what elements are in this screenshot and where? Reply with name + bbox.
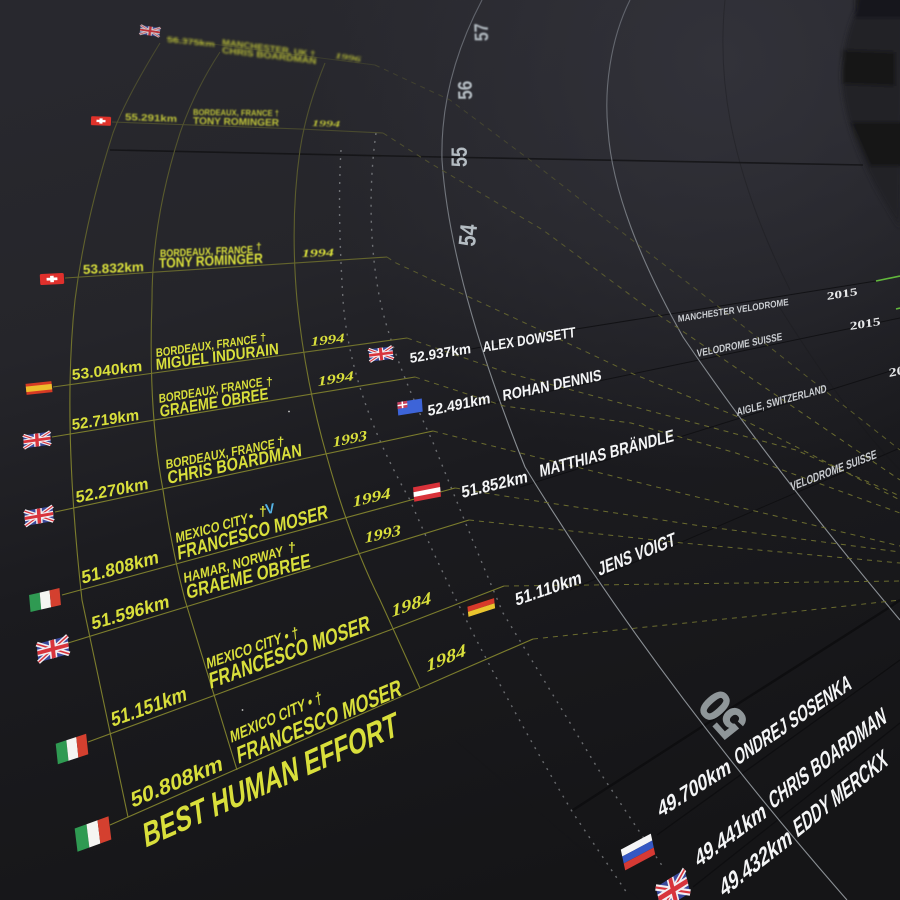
record row 56.375km: 56.375km	[167, 35, 215, 49]
record row 50.808km: 1984	[425, 640, 467, 676]
record row 55.291km: TONY ROMINGER	[193, 116, 280, 129]
row: rohan dennis	[427, 316, 881, 420]
row: eddy merckx	[717, 744, 890, 900]
faint outer rings	[455, 0, 900, 900]
row: ondrej sosenka: 49.700km	[656, 752, 733, 823]
flag: great britain, top	[139, 25, 161, 37]
flag: great britain, hamar	[37, 636, 69, 662]
record row 53.832km: BORDEAUX, FRANCE	[160, 244, 253, 260]
record row 56.375km: 1996	[335, 51, 363, 64]
flag: russia, sosenka	[621, 834, 655, 870]
record row 51.808km	[81, 485, 392, 588]
flag: great britain, boardman 49km	[656, 869, 690, 900]
record row 52.270km: 1993	[332, 428, 368, 451]
dotted grey arcs	[340, 133, 663, 893]
row: jens voigt: JENS VOIGT	[597, 528, 677, 580]
record row 51.596km: †	[288, 539, 296, 555]
row: alex dowsett	[409, 286, 858, 366]
row: alex dowsett: 2015	[826, 286, 858, 303]
record row 52.719km: GRAEME OBREE	[159, 384, 269, 421]
scale label 55: 55	[447, 147, 472, 167]
dark hour creases behind rows	[110, 150, 900, 887]
flag: italy, moser 1994	[29, 588, 61, 612]
record row 53.040km: 53.040km	[71, 358, 143, 384]
record row 51.151km: MEXICO CITY • †	[206, 624, 299, 673]
record row 52.719km: 52.719km	[71, 407, 139, 434]
flag: spain	[25, 381, 53, 395]
record row 51.808km: †	[259, 503, 267, 519]
heading: best human effort: BEST HUMAN EFFORT	[141, 704, 400, 856]
row: rohan dennis: 2015	[849, 316, 881, 333]
record row 53.040km: MIGUEL INDURAIN	[155, 340, 279, 374]
row: alex dowsett: 52.937km	[409, 340, 471, 366]
record row 53.832km: 1994	[302, 247, 335, 260]
flag: switzerland, row 55km	[91, 116, 111, 126]
record row 51.596km	[91, 522, 402, 634]
record row 53.832km: 53.832km	[83, 259, 144, 277]
record row 51.808km: V	[264, 500, 276, 517]
record row 53.832km	[83, 242, 335, 277]
record row 52.270km: †	[277, 434, 284, 449]
dark central disc, top right	[842, 0, 900, 228]
record row 50.808km: 50.808km	[130, 751, 224, 813]
record row 51.596km: 1993	[364, 522, 402, 547]
flag: germany, voigt	[467, 593, 495, 617]
paper specks	[242, 411, 290, 711]
row: alex dowsett: MANCHESTER VELODROME	[678, 297, 789, 325]
record row 52.719km: BORDEAUX, FRANCE	[159, 375, 263, 406]
speed scale labels	[447, 23, 757, 747]
record row 53.040km: 1994	[310, 330, 346, 349]
flag: italy, moser 51.151	[56, 734, 88, 764]
row: matthias brandle	[461, 359, 900, 502]
grey speed scale arcs	[442, 0, 900, 900]
flag: australia, dennis	[397, 398, 423, 416]
row: rohan dennis: VELODROME SUISSE	[696, 331, 782, 360]
record row 51.596km: GRAEME OBREE	[186, 550, 311, 604]
record row 56.375km	[167, 35, 363, 66]
row: matthias brandle: MATTHIAS BRÄNDLE	[539, 425, 675, 481]
record row 51.151km: 1984	[391, 588, 432, 621]
record row 52.270km: 52.270km	[75, 474, 149, 507]
row: jens voigt	[514, 447, 877, 610]
row: ondrej sosenka: ONDREJ SOSENKA	[732, 668, 854, 771]
record row 51.808km: MEXICO CITY	[175, 510, 249, 546]
record row 50.808km: MEXICO CITY • †	[229, 688, 323, 747]
record row 51.596km: HAMAR, NORWAY	[183, 543, 284, 586]
record row 55.291km: 55.291km	[125, 112, 177, 125]
record row 53.040km: †	[260, 332, 266, 344]
record row 52.719km: 1994	[317, 368, 355, 389]
record row 53.832km: TONY ROMINGER	[159, 250, 263, 271]
flag: great britain, dowsett	[368, 346, 394, 362]
row: chris boardman: 49.441km	[693, 796, 768, 873]
record row 53.832km: †	[256, 242, 262, 253]
record row 52.719km	[71, 368, 355, 434]
scale label 56: 56	[455, 80, 477, 100]
row: matthias brandle: AIGLE, SWITZERLAND	[736, 383, 827, 419]
record row 56.375km: CHRIS BOARDMAN	[222, 45, 317, 66]
record row 50.808km	[130, 640, 467, 813]
row: chris boardman	[693, 701, 889, 873]
record row 51.596km: 51.596km	[91, 591, 170, 634]
panel: yellow row flags	[23, 25, 161, 852]
panel: human effort records, yellow	[71, 35, 467, 856]
row: rohan dennis: 52.491km	[427, 390, 491, 420]
record row 52.270km	[75, 428, 368, 507]
flag: switzerland, row 53km	[40, 273, 64, 285]
row: ondrej sosenka	[656, 668, 854, 823]
record row 51.151km: 51.151km	[110, 683, 188, 732]
record row 52.270km: CHRIS BOARDMAN	[167, 440, 302, 488]
record row 51.808km: FRANCESCO MOSER	[177, 501, 329, 565]
record row 55.291km: BORDEAUX, FRANCE †	[193, 107, 279, 118]
yellow row leader lines	[52, 38, 533, 825]
record row 52.719km: †	[266, 375, 273, 389]
row: rohan dennis: ROHAN DENNIS	[502, 367, 602, 405]
record row 53.040km	[71, 330, 346, 384]
record row 50.808km: FRANCESCO MOSER	[235, 674, 403, 769]
row: matthias brandle: 51.852km	[461, 467, 528, 502]
flag: great britain, obree	[23, 432, 51, 448]
scale label 54: 54	[454, 222, 483, 248]
panel: best bicycle records, white	[368, 286, 900, 900]
green record segments	[876, 276, 900, 309]
record row 51.151km: FRANCESCO MOSER	[208, 610, 371, 694]
row: alex dowsett: ALEX DOWSETT	[482, 325, 576, 356]
record row 55.291km	[125, 107, 341, 129]
dashed connectors to the centre	[375, 65, 900, 639]
row: jens voigt: 51.110km	[514, 567, 583, 610]
flag: great britain, boardman	[24, 506, 54, 526]
record row 51.151km	[110, 588, 432, 732]
scale label 57: 57	[472, 23, 493, 42]
record row 51.808km: 1994	[352, 485, 392, 511]
record row 51.808km: 51.808km	[81, 547, 159, 588]
paper highlight, top right	[0, 0, 900, 500]
yellow column arcs	[70, 43, 420, 817]
flag: italy, moser 50.808	[75, 816, 111, 852]
record row 53.040km: BORDEAUX, FRANCE	[156, 332, 257, 360]
record row 51.808km: •	[247, 508, 256, 524]
scale label 50: 50	[690, 680, 757, 747]
flag: austria, brandle	[413, 482, 441, 502]
record row 55.291km: 1994	[312, 118, 341, 129]
record row 52.270km: BORDEAUX, FRANCE	[165, 436, 275, 472]
record row 56.375km: MANCHESTER, UK †	[222, 37, 316, 59]
